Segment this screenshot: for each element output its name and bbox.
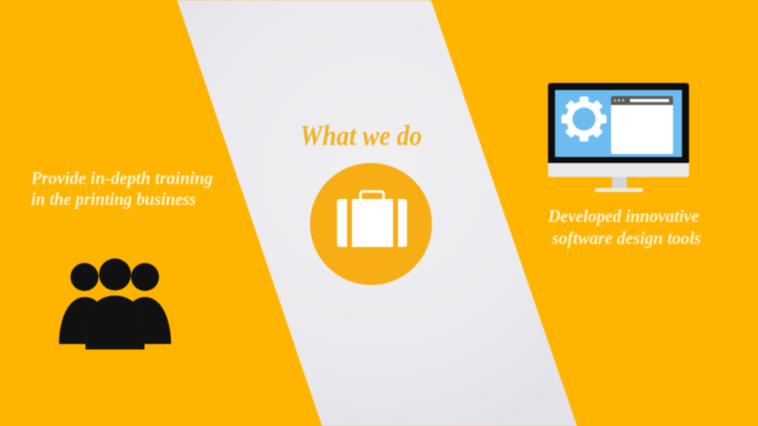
text block: training: in the printing business [31,189,196,209]
monitor bezel [548,83,689,163]
gear icon [562,96,606,142]
monitor chin [548,163,689,177]
text block: software tools: Developed innovative [547,206,699,226]
monitor screen [555,90,682,157]
monitor neck [612,177,627,188]
text block: software tools [547,206,701,248]
briefcase body [337,199,407,247]
icon: briefcase in circle [310,163,432,285]
heading: What we do: What we do [300,120,422,152]
text block: training: Provide in-depth training [30,168,213,188]
icon: desktop monitor with gear and window [548,83,689,192]
monitor base [595,188,643,192]
briefcase handle [360,192,384,199]
text block: software tools: software design tools [551,228,701,248]
text block: training [30,168,213,209]
application window [611,96,673,154]
icon: group of people [59,258,171,349]
diagonal centre band [176,0,578,426]
